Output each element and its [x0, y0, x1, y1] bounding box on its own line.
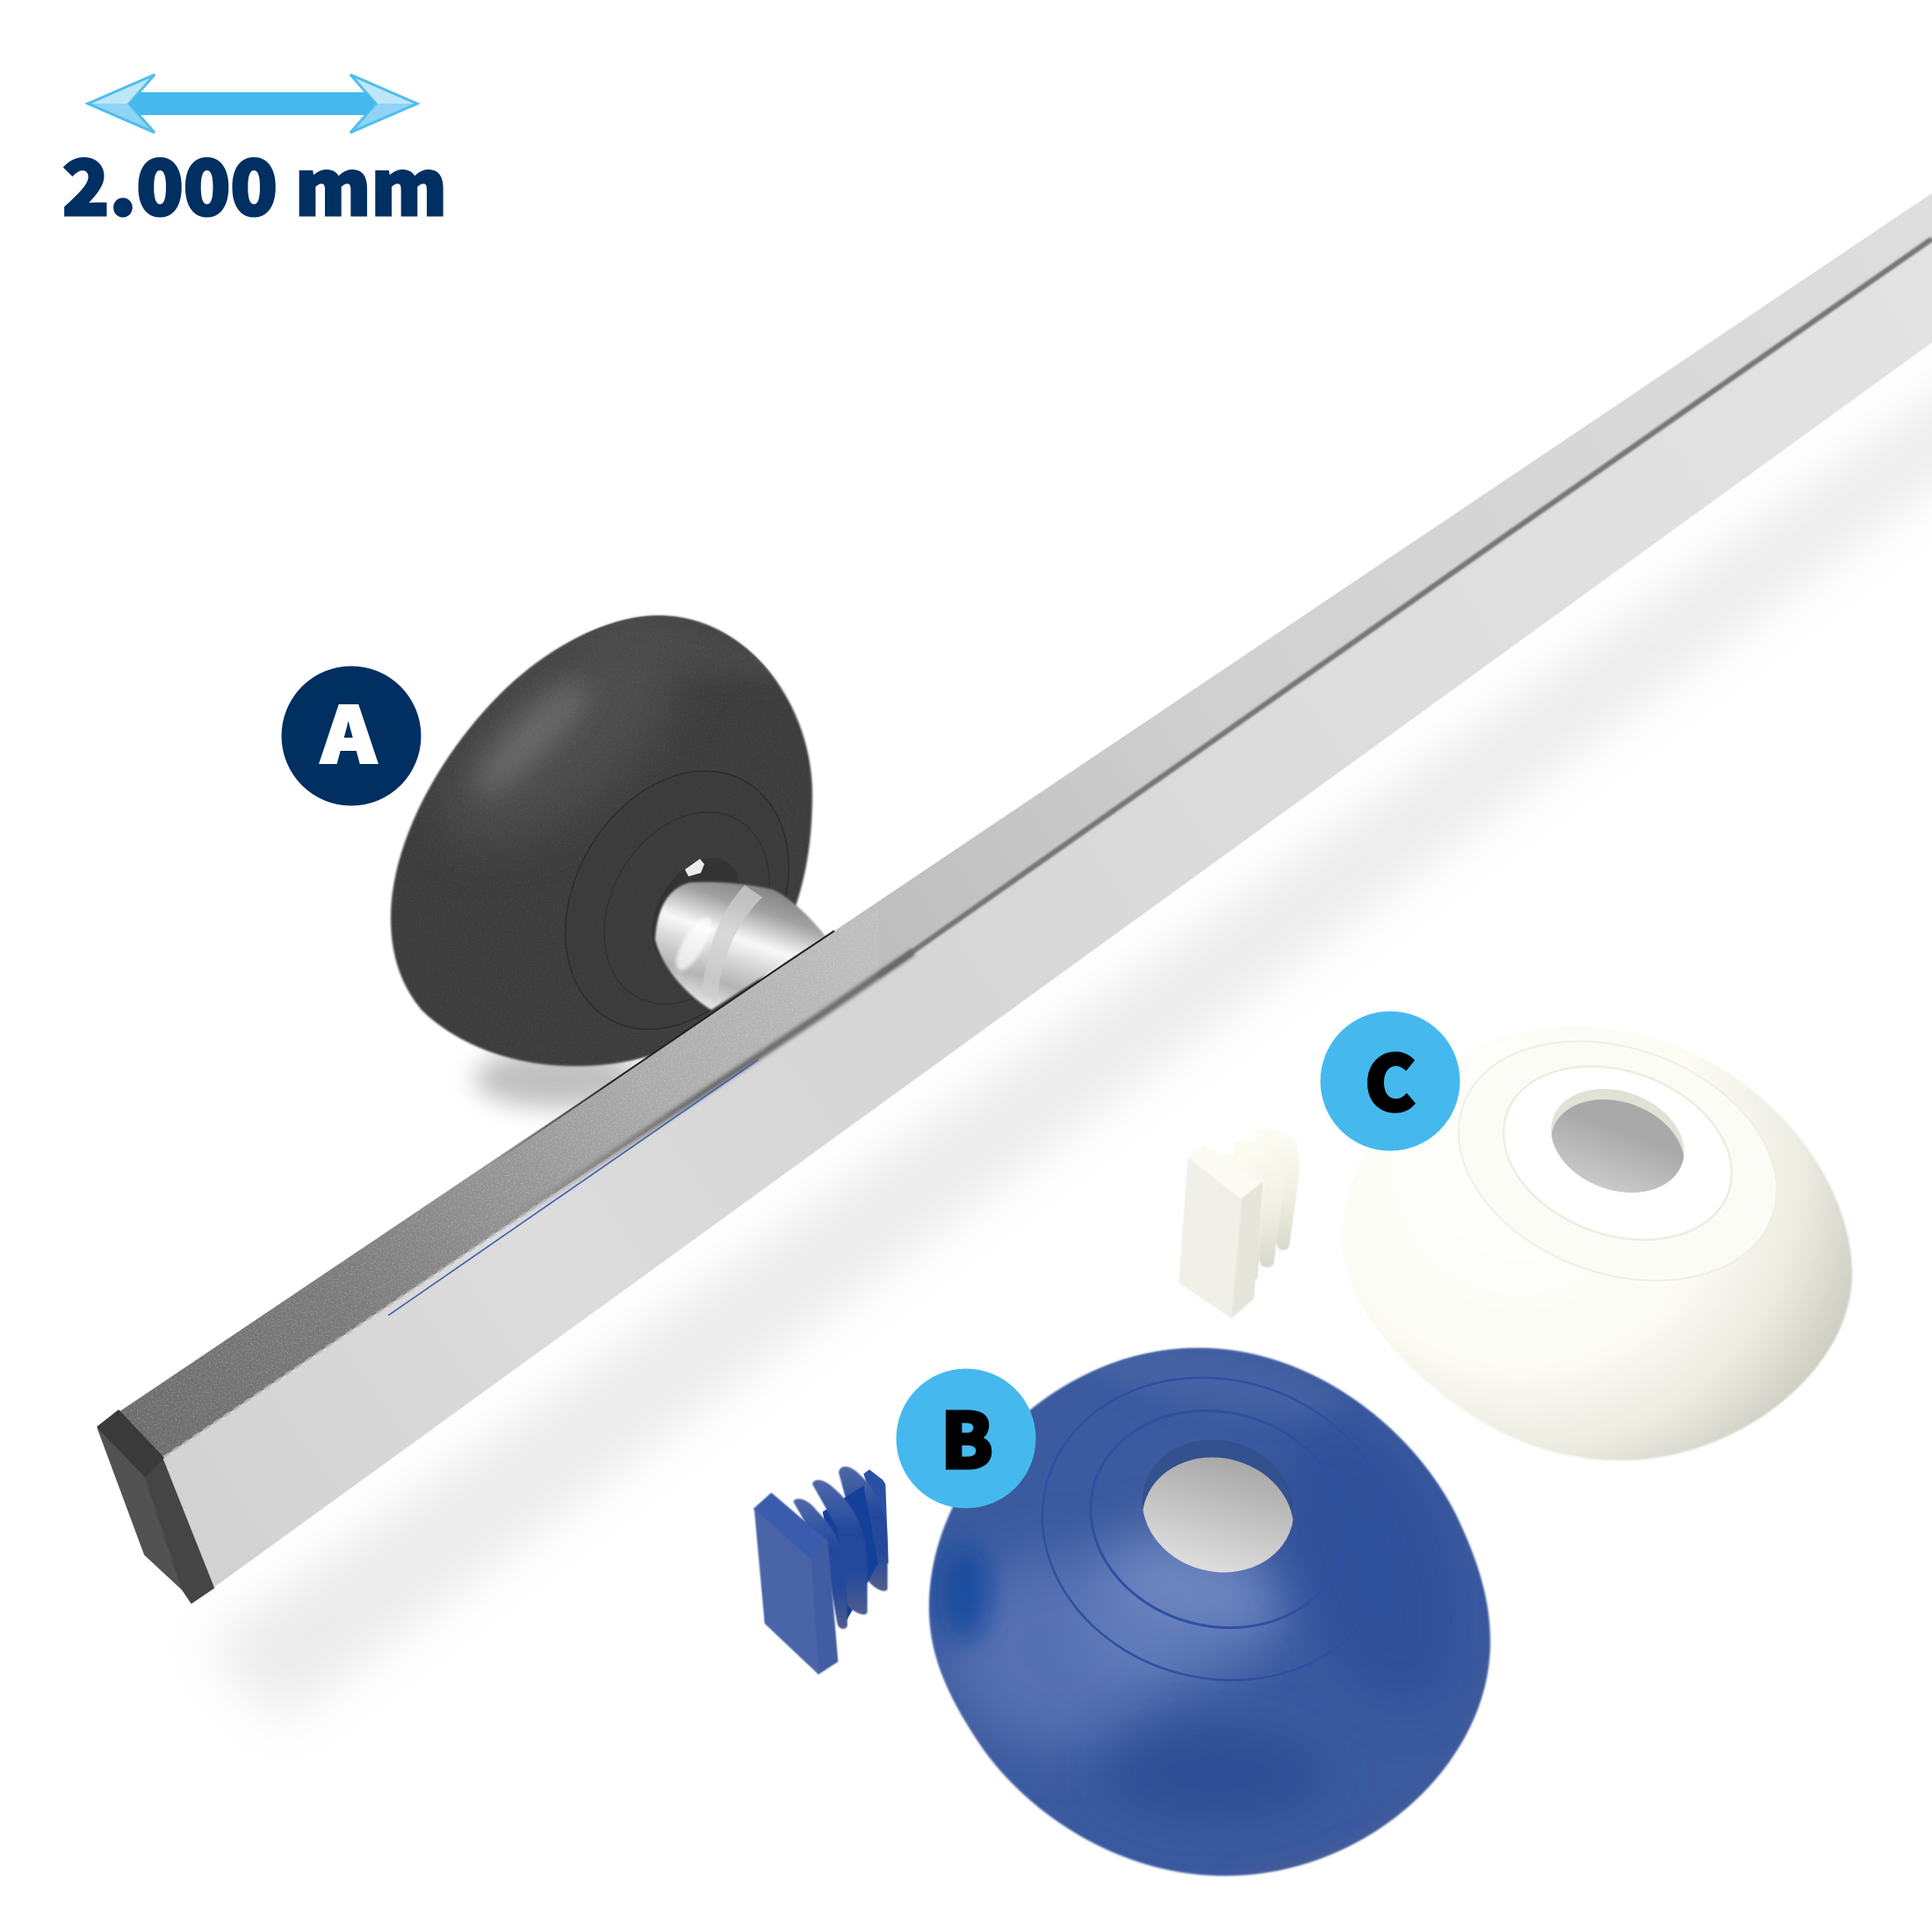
plug B middle fin	[812, 1480, 868, 1614]
knob body	[391, 616, 812, 1066]
bar dark groove section	[492, 952, 913, 1234]
aluminium bar	[119, 193, 1932, 1588]
plug B cap	[754, 1494, 837, 1674]
dome B hole	[1142, 1440, 1294, 1572]
badge A: A	[321, 674, 378, 785]
dome B outer ring	[1008, 1339, 1426, 1719]
end cap	[98, 1411, 213, 1603]
dome C	[1342, 999, 1852, 1460]
bar side face	[162, 239, 1932, 1588]
badge C	[1321, 1012, 1460, 1150]
dimension label: 2.000 mm	[62, 127, 447, 238]
metal grain	[119, 902, 878, 1458]
dome B body	[929, 1348, 1490, 1876]
pin tab	[685, 859, 704, 876]
bar top edge line	[492, 931, 834, 1164]
plug B back block	[863, 1469, 889, 1566]
dome C outer ring	[1424, 999, 1811, 1323]
bar shadow	[206, 338, 1932, 1721]
knob A	[391, 577, 833, 1070]
badge A	[281, 666, 422, 806]
dome B	[927, 1346, 1492, 1878]
plug B core	[823, 1486, 878, 1622]
knob shadow	[474, 1049, 641, 1108]
plug B	[754, 1467, 889, 1674]
bar ridge sparkle	[162, 1194, 553, 1458]
bar groove	[878, 239, 1932, 976]
badge B	[896, 1368, 1036, 1509]
dome C inner ring	[1479, 1036, 1756, 1270]
dome C hole	[1551, 1089, 1684, 1193]
knob rings	[521, 731, 833, 1070]
bar blue reflection	[388, 1060, 758, 1316]
dimension arrow	[88, 75, 417, 133]
plug C cap	[1179, 1146, 1262, 1317]
knob shading	[391, 577, 812, 1066]
bar top face	[119, 193, 1932, 1458]
plug C fins	[1222, 1128, 1300, 1280]
plug B back fin	[839, 1467, 888, 1591]
plug B front fin	[793, 1499, 847, 1629]
badge B: B	[941, 1381, 993, 1491]
dome B inner ring	[1066, 1383, 1370, 1655]
metal pin	[655, 882, 825, 1010]
dome B shading	[929, 1348, 1489, 1876]
badge C: C	[1365, 1023, 1416, 1134]
dome C body	[1342, 1026, 1852, 1460]
plug C	[1179, 1128, 1300, 1317]
